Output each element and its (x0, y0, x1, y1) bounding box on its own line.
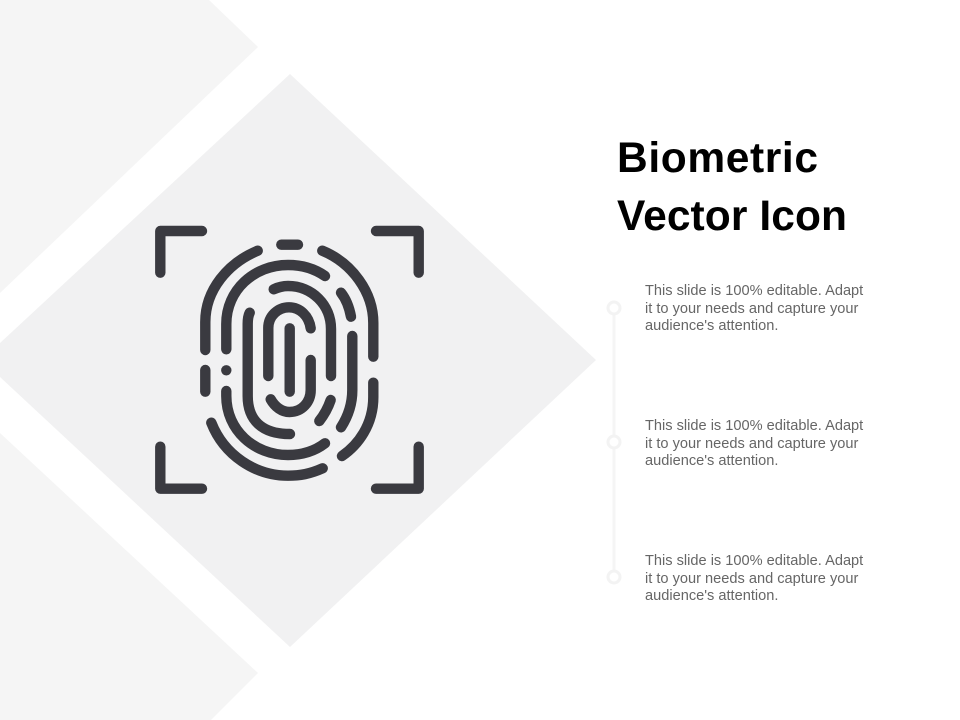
text block 3: it to your needs and capture your (645, 571, 859, 587)
title: Biometric (617, 135, 818, 182)
text block 1: it to your needs and capture your (645, 301, 859, 317)
background shape: top-left band (0, 0, 258, 293)
timeline connector (608, 302, 620, 583)
timeline node 1 (608, 302, 620, 314)
icon: biometric fingerprint scan (160, 231, 419, 489)
icon: fingerprint ridges (205, 245, 373, 476)
text block 3: audience's attention. (645, 588, 778, 604)
icon: scan frame corners (160, 231, 419, 489)
text block 2: audience's attention. (645, 453, 778, 469)
timeline node 3 (608, 571, 620, 583)
text block 2: it to your needs and capture your (645, 436, 859, 452)
text block 2: This slide is 100% editable. Adapt (645, 418, 863, 434)
text block 1: This slide is 100% editable. Adapt (645, 283, 863, 299)
text block 3: This slide is 100% editable. Adapt (645, 553, 863, 569)
title: Vector Icon (617, 193, 847, 240)
timeline node 2 (608, 436, 620, 448)
background shape: central diamond (0, 74, 596, 647)
text block 1: audience's attention. (645, 318, 778, 334)
background shape: bottom-left band (0, 433, 258, 720)
